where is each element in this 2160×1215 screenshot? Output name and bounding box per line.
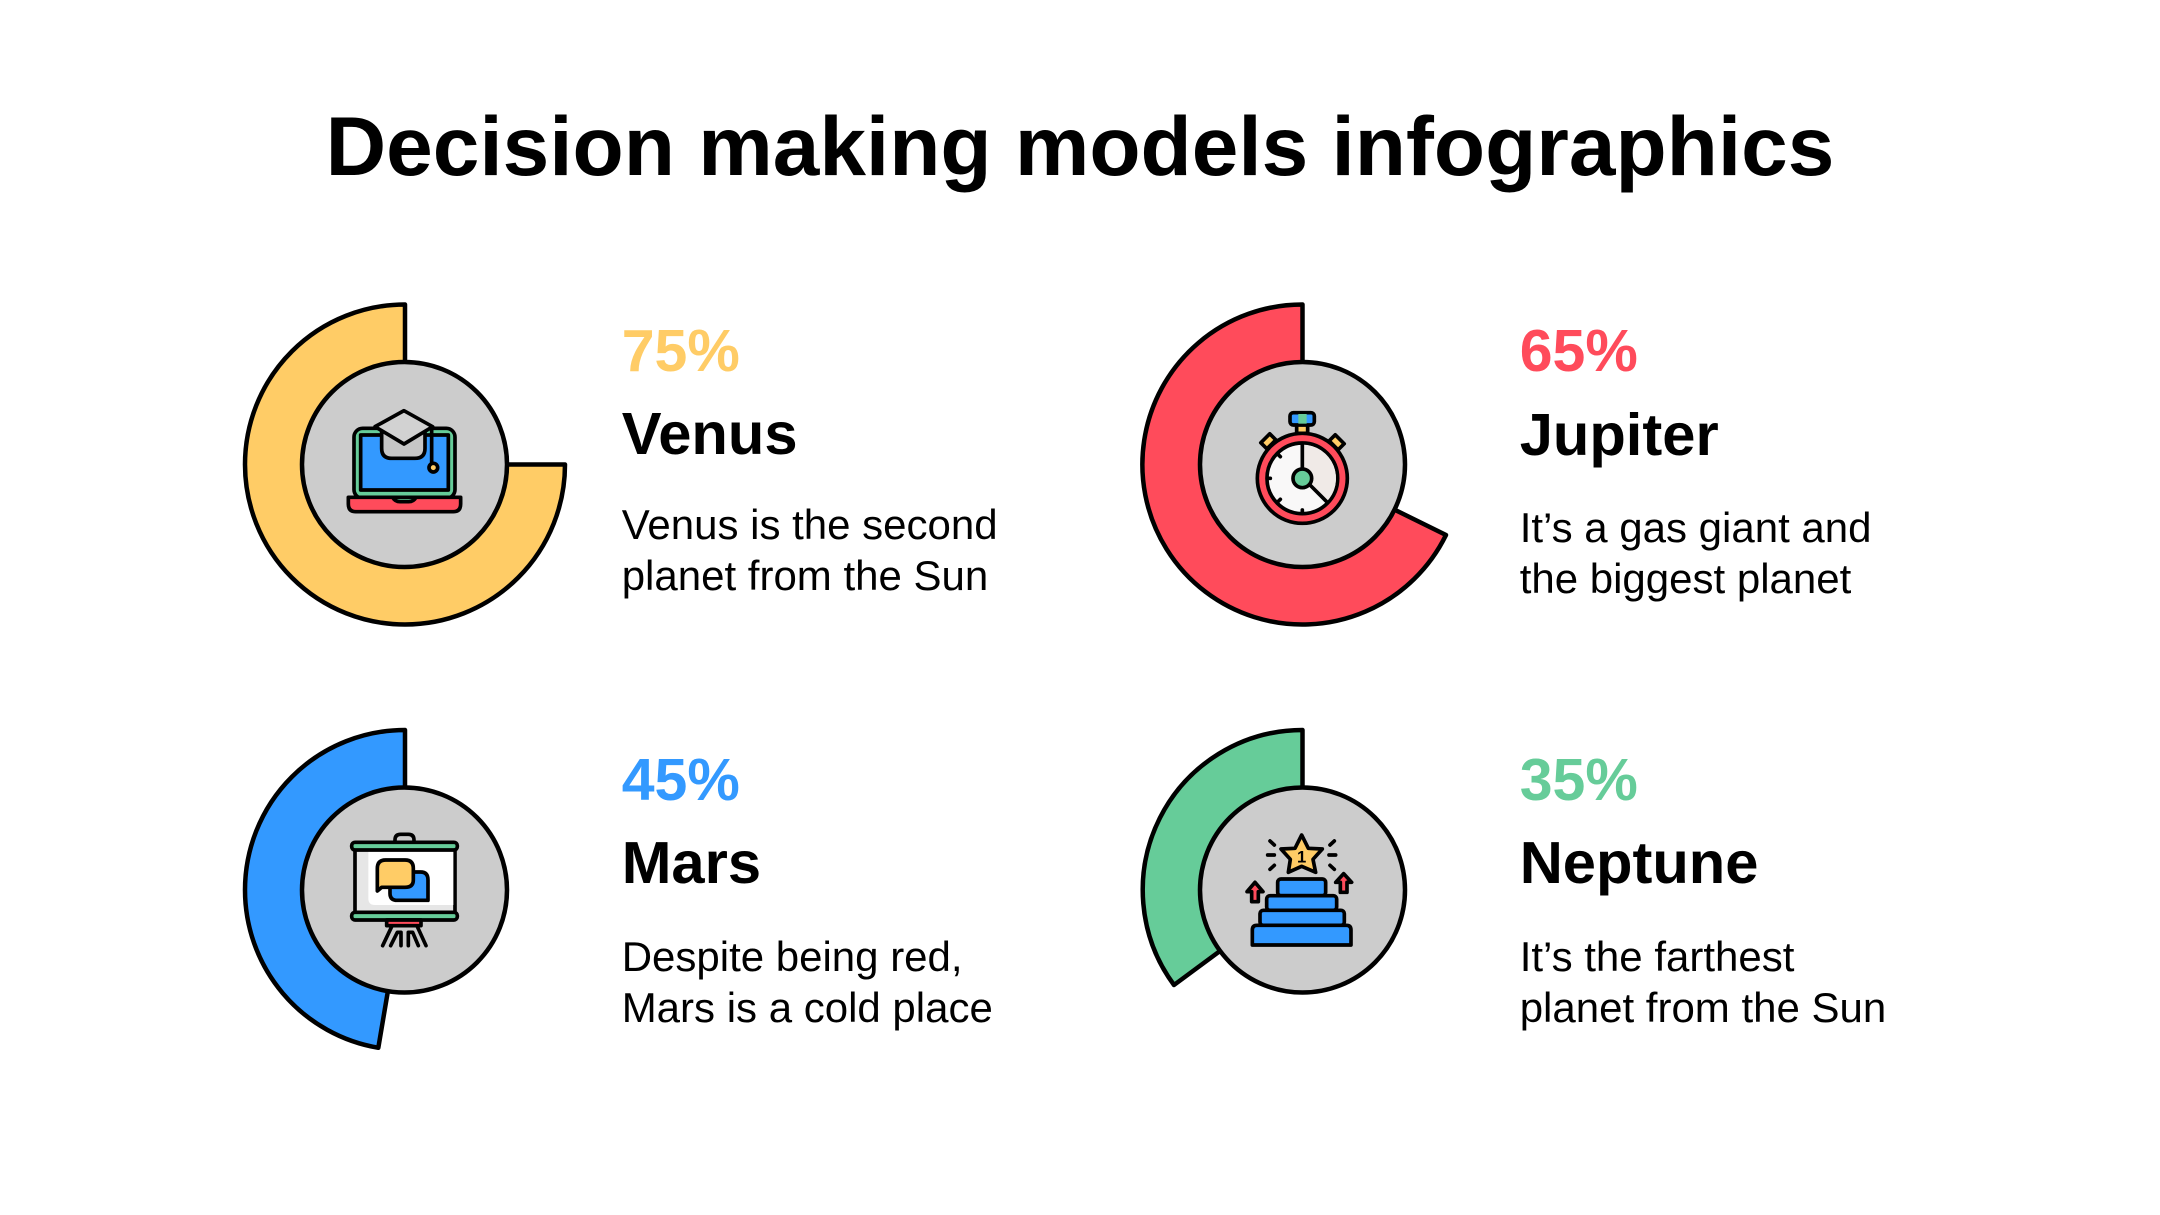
description: planet from the Sun (622, 552, 988, 599)
description: It’s the farthest (1520, 932, 1794, 980)
description: Venus is the second (622, 501, 998, 548)
chart: Venus 75% donut with icon (242, 302, 568, 627)
name: Venus (622, 400, 798, 466)
inner circle (1200, 788, 1405, 992)
donut arc 45% (245, 730, 405, 1048)
donut arc 65% (1142, 304, 1446, 624)
description: planet from the Sun (1520, 984, 1886, 1030)
donut arc 75% (245, 304, 565, 624)
name: Mars (622, 829, 761, 896)
percentage: 45% (622, 747, 740, 813)
inner circle (302, 362, 507, 567)
icon: podium with star and arrows (1247, 835, 1352, 945)
percentage: 65% (1520, 318, 1638, 384)
panel: Neptune (1140, 728, 1886, 1030)
title: Decision making models infographics (326, 99, 1834, 193)
percentage: 75% (622, 318, 740, 384)
icon: presentation board with speech bubbles (352, 834, 457, 946)
name: Neptune (1520, 829, 1758, 896)
panel: Mars (242, 728, 993, 1050)
donut arc 35% (1143, 730, 1302, 985)
description (622, 501, 998, 599)
inner circle (302, 788, 507, 992)
panel: Jupiter (1140, 302, 1872, 627)
description (1520, 504, 1872, 602)
chart: Jupiter 65% donut with icon (1140, 302, 1448, 627)
description: the biggest planet (1520, 554, 1851, 602)
name: Jupiter (1520, 400, 1719, 468)
description (1520, 932, 1886, 1030)
description: It’s a gas giant and (1520, 504, 1872, 550)
percentage: 35% (1520, 747, 1638, 813)
description (622, 932, 993, 1030)
panel: Venus (242, 302, 998, 627)
icon: stopwatch (1257, 413, 1347, 523)
icon: podium with star and arrows: 1 (1297, 847, 1306, 866)
description: Despite being red, (622, 932, 963, 980)
description: Mars is a cold place (622, 984, 993, 1030)
icon: laptop with graduation cap (348, 411, 461, 512)
chart: Mars 45% donut with icon (242, 728, 510, 1050)
inner circle (1200, 362, 1405, 567)
chart: Neptune 35% donut with icon (1140, 728, 1408, 995)
